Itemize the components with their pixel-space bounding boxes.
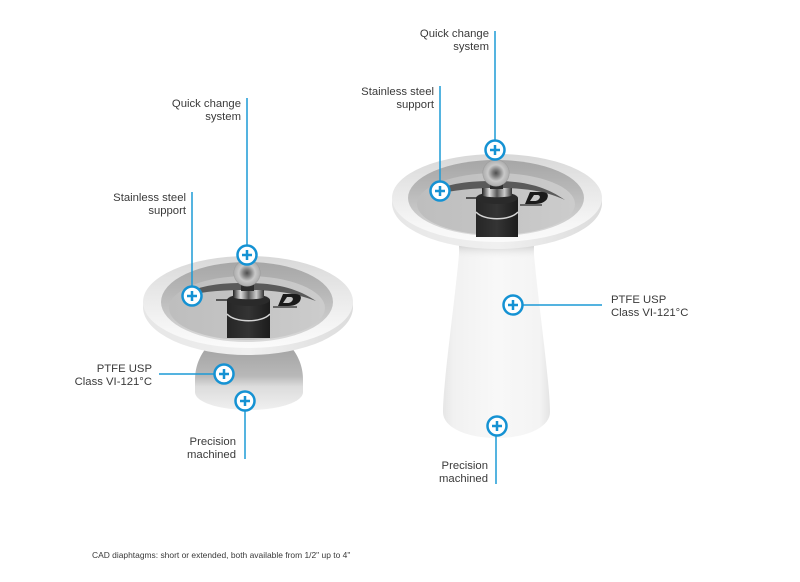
callout: PTFE USP, short	[75, 363, 234, 388]
callout: precision machined, short: Precision	[190, 436, 236, 448]
callout: precision machined, extended	[439, 416, 506, 485]
extended diaphragm product	[392, 154, 602, 438]
callout: precision machined, extended: Precision	[442, 460, 488, 472]
callout: quick change system, extended: Quick change	[420, 28, 489, 40]
callout: quick change system, short: system	[205, 111, 241, 123]
callout: stainless steel support, short: support	[148, 205, 187, 217]
callout: PTFE USP, short: PTFE USP	[97, 363, 152, 375]
callout: stainless steel support, extended: support	[396, 99, 435, 111]
callout: quick change system, extended	[420, 28, 504, 160]
short diaphragm product	[143, 256, 353, 410]
callout: PTFE USP, short: Class VI-121°C	[75, 376, 152, 388]
extended diaphragm post	[476, 181, 518, 237]
short diaphragm base	[195, 348, 303, 410]
callout: stainless steel support, short: Stainless steel	[113, 192, 186, 204]
extended diaphragm logo	[466, 192, 548, 206]
callout: stainless steel support, extended	[361, 86, 450, 200]
callout: precision machined, extended: machined	[439, 473, 488, 485]
short diaphragm post	[227, 282, 270, 338]
callout: PTFE USP, extended	[504, 294, 688, 319]
callout: quick change system, extended: system	[453, 41, 489, 53]
short diaphragm dish	[143, 256, 353, 355]
short diaphragm logo	[216, 294, 301, 308]
short diaphragm steel ball	[234, 260, 260, 286]
callout: quick change system, short	[172, 98, 256, 264]
callout: quick change system, short: Quick change	[172, 98, 241, 110]
callout: PTFE USP, extended: PTFE USP	[611, 294, 666, 306]
footnote: CAD diaphtagms: short or extended, both available from 1/2" up to 4"	[92, 550, 350, 560]
callout: stainless steel support, short	[113, 192, 202, 306]
callout: PTFE USP, extended: Class VI-121°C	[611, 307, 688, 319]
extended diaphragm dish	[392, 154, 602, 249]
callout: stainless steel support, extended: Stainless steel	[361, 86, 434, 98]
callout: precision machined, short	[187, 392, 254, 461]
extended diaphragm steel ball	[482, 160, 510, 186]
extended diaphragm conical body	[443, 240, 550, 438]
callout: precision machined, short: machined	[187, 449, 236, 461]
